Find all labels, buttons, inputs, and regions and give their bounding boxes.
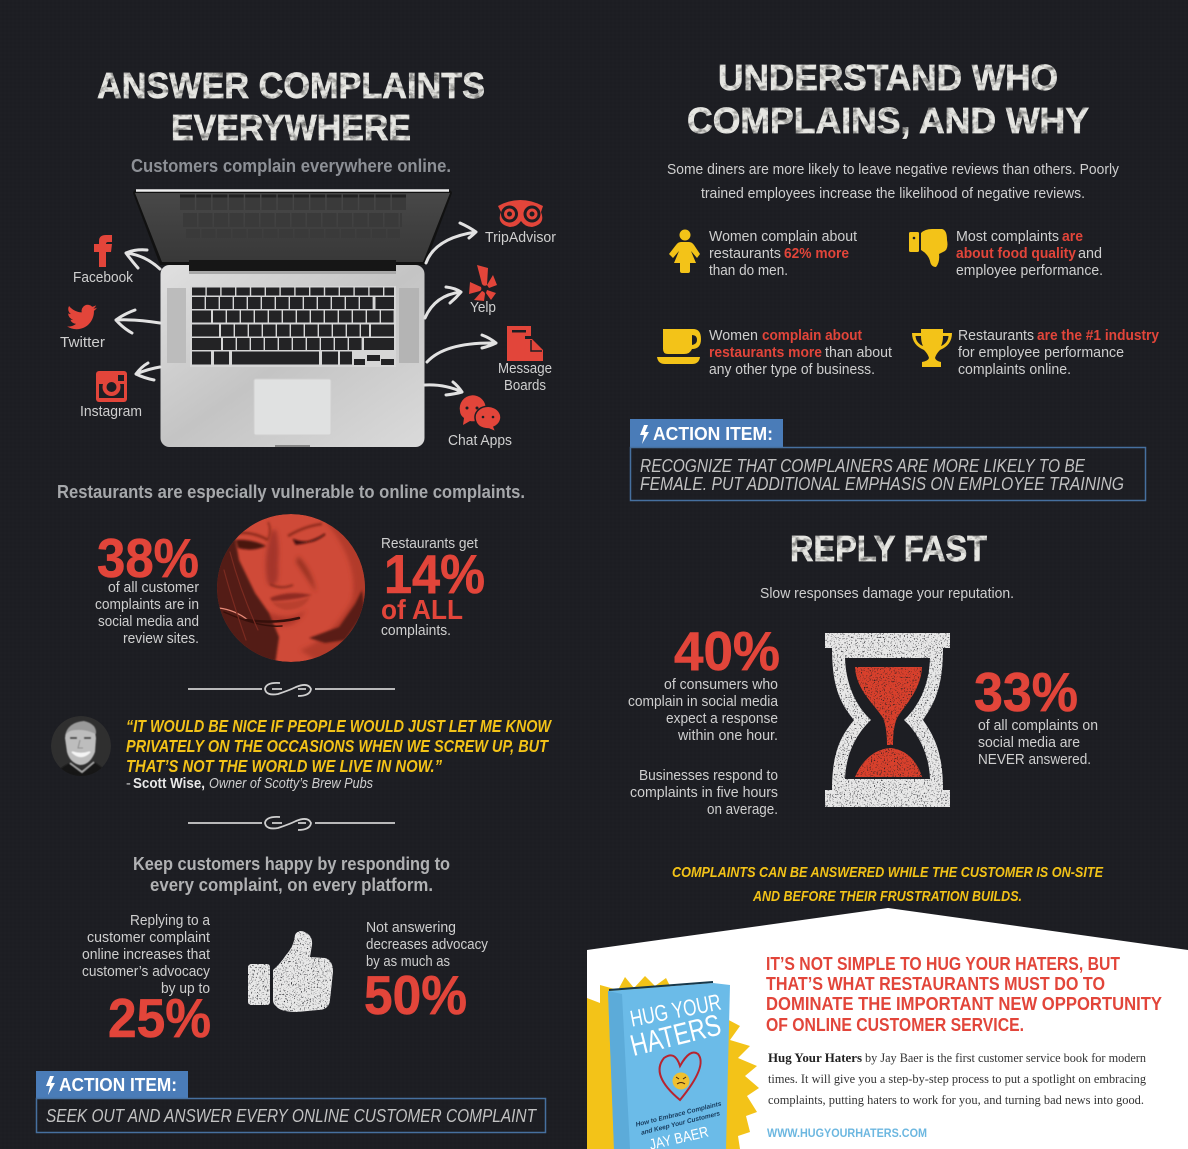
- intro text: diners: [667, 162, 1120, 202]
- action item: right column: RECOGNIZE THAT COMPLAINERS ARE MORE LIKELY TO BE: [640, 456, 1086, 476]
- title: answer complaints everywhere: [97, 65, 485, 148]
- laptop illustration: [133, 190, 452, 447]
- action item: right column: [630, 419, 1146, 500]
- icon: chalk thumbs up: [248, 931, 333, 1012]
- panel: book promotion: [587, 908, 1188, 1149]
- action item: right column: FEMALE. PUT ADDITIONAL EMPHASIS ON EMPLOYEE TRAINING: [640, 474, 1124, 494]
- stat: 50 percent: by as much as: [366, 954, 450, 970]
- fact: women complain 62 percent more: than do men.: [709, 263, 788, 279]
- body copy: times. It will give you a step-by-step process to put a spotlight on embracing: [768, 1072, 1147, 1086]
- stat: 14 percent of all: of ALL: [381, 594, 463, 625]
- text: businesses respond: Businesses respond to: [639, 768, 778, 784]
- title: answer complaints everywhere: EVERYWHERE: [171, 107, 411, 148]
- fact: restaurants are number one industry: are the #1 industry: [1037, 328, 1159, 344]
- subheading: keep customers happy: Keep customers happy by responding to: [133, 854, 450, 874]
- icon: chalk hourglass: [825, 633, 950, 807]
- subheading: keep customers happy: every complaint, on every platform.: [150, 875, 433, 895]
- icon and label: message boards: Message: [498, 361, 552, 377]
- icon and label: yelp: Yelp: [470, 300, 496, 316]
- body copy: Hug Your Haters: [768, 1051, 862, 1065]
- book cover: [608, 982, 730, 1149]
- action item: left column: ACTION ITEM:: [59, 1075, 177, 1095]
- icon and label: chat apps: [448, 395, 512, 449]
- body copy: by Jay Baer is the first customer service book for modern: [865, 1051, 1147, 1065]
- starburst behind book: [587, 976, 759, 1149]
- icon and label: tripadvisor: [485, 200, 556, 246]
- fact: women complain about restaurants more: than about: [825, 345, 892, 361]
- fact: women complain 62 percent more: Women complain about: [709, 229, 857, 245]
- stat: 50 percent: Not answering: [366, 920, 456, 936]
- stat: 25 percent: Replying to a: [130, 913, 211, 929]
- icon and label: chat apps: Chat Apps: [448, 433, 512, 449]
- action item: left column: SEEK OUT AND ANSWER EVERY ONLINE CUSTOMER COMPLAINT: [46, 1106, 538, 1126]
- stat: 40 percent: of consumers who: [664, 677, 778, 693]
- intro text: diners: Some diners are more likely to leave negative reviews than others. Poorly: [667, 162, 1120, 178]
- book cover: HATERS: [627, 1009, 724, 1063]
- icon: trophy: [912, 329, 952, 367]
- fact: restaurants are number one industry: for employee performance: [958, 345, 1124, 361]
- stat: 40 percent: expect a response: [666, 711, 778, 727]
- text: businesses respond: complaints in five hours: [630, 785, 778, 801]
- title: understand who complains: [687, 57, 1089, 141]
- fact: women complain 62 percent more: [669, 229, 857, 279]
- stat: 33 percent: [974, 661, 1098, 768]
- callout: complaints can be answered: [672, 864, 1104, 905]
- title: understand who complains: COMPLAINS, AND WHY: [687, 100, 1089, 141]
- stat: 40 percent: complain in social media: [628, 694, 779, 710]
- subheading: customers complain: Customers complain everywhere online.: [131, 156, 451, 176]
- stat: 33 percent: social media are: [978, 735, 1080, 751]
- fact: women complain about restaurants more: restaurants more: [709, 345, 822, 361]
- title: understand who complains: UNDERSTAND WHO: [718, 57, 1058, 98]
- icon and label: message boards: [498, 326, 552, 394]
- stat: 38 percent: social media and: [98, 614, 199, 630]
- book cover: HUG YOUR: [628, 989, 723, 1032]
- stat: 25 percent: customer complaint: [87, 930, 210, 946]
- stat: 25 percent: 25%: [108, 987, 211, 1049]
- stat: 50 percent: 50%: [364, 964, 467, 1026]
- icon and label: twitter: [60, 305, 105, 351]
- stat: 33 percent: of all complaints on: [978, 718, 1098, 734]
- icon and label: twitter: Twitter: [60, 335, 105, 351]
- portrait: scott wise: [50, 716, 112, 778]
- photo: frowning woman in red: [217, 514, 365, 662]
- fact: women complain 62 percent more: restaurants: [709, 246, 781, 262]
- quote: scott wise: THAT’S NOT THE WORLD WE LIVE IN NOW.”: [126, 756, 442, 776]
- text: businesses respond: on average.: [707, 802, 778, 818]
- book cover: and Keep Your Customers: [640, 1110, 721, 1137]
- stat: 38 percent: 38%: [97, 527, 199, 589]
- stat: 50 percent: [364, 920, 489, 1026]
- icon and label: facebook: Facebook: [73, 270, 134, 286]
- icon and label: instagram: Instagram: [80, 404, 142, 420]
- fact: complaints about food quality: [909, 229, 1103, 279]
- heading: hug your haters: OF ONLINE CUSTOMER SERVICE.: [766, 1014, 1024, 1035]
- quote: scott wise: Scott Wise,: [133, 776, 205, 792]
- subheading: keep customers happy: [133, 854, 450, 895]
- stat: 38 percent: [95, 527, 199, 647]
- title: answer complaints everywhere: ANSWER COMPLAINTS: [97, 65, 485, 106]
- icon and label: tripadvisor: TripAdvisor: [485, 230, 556, 246]
- quote: scott wise: -: [126, 776, 131, 792]
- stat: 25 percent: online increases that: [82, 947, 210, 963]
- subheading: slow responses: Slow responses damage your reputation.: [760, 586, 1014, 602]
- fact: restaurants are number one industry: complaints online.: [958, 362, 1071, 378]
- heading: hug your haters: IT’S NOT SIMPLE TO HUG YOUR HATERS, BUT: [766, 953, 1121, 974]
- icon and label: yelp: [469, 265, 497, 316]
- stat: 25 percent: [82, 913, 211, 1049]
- fact: complaints about food quality: about food quality: [956, 246, 1076, 262]
- action item: right column: ACTION ITEM:: [653, 424, 773, 444]
- quote: scott wise: “IT WOULD BE NICE IF PEOPLE WOULD JUST LET ME KNOW: [126, 716, 552, 736]
- fact: women complain 62 percent more: 62% more: [784, 246, 849, 262]
- fact: women complain about restaurants more: [657, 328, 892, 378]
- stat: 25 percent: by up to: [161, 981, 210, 997]
- icon and label: facebook: [73, 235, 134, 286]
- divider flourish: [188, 683, 395, 696]
- body copy: [768, 1051, 1147, 1107]
- fact: women complain about restaurants more: complain about: [762, 328, 862, 344]
- stat: 40 percent: 40%: [674, 620, 780, 682]
- stat: 14 percent of all: [381, 536, 485, 639]
- stat: 33 percent: NEVER answered.: [978, 752, 1091, 768]
- stat: 38 percent: of all customer: [108, 580, 199, 596]
- stat: 14 percent of all: 14%: [384, 543, 485, 605]
- callout: complaints can be answered: COMPLAINTS CAN BE ANSWERED WHILE THE CUSTOMER IS ON-SITE: [672, 864, 1104, 881]
- arrows from laptop to platforms: [116, 223, 496, 395]
- book cover: How to Embrace Complaints: [635, 1100, 723, 1129]
- icon: coffee cup: [657, 329, 701, 364]
- callout: complaints can be answered: AND BEFORE THEIR FRUSTRATION BUILDS.: [752, 888, 1022, 905]
- quote: scott wise: [126, 716, 552, 792]
- divider flourish: [188, 817, 395, 830]
- heading: hug your haters: THAT’S WHAT RESTAURANTS MUST DO TO: [766, 973, 1105, 994]
- fact: complaints about food quality: Most complaints: [956, 229, 1059, 245]
- stat: 14 percent of all: Restaurants get: [381, 536, 478, 552]
- fact: complaints about food quality: are: [1062, 229, 1083, 245]
- stat: 25 percent: customer’s advocacy: [82, 964, 211, 980]
- subheading: restaurants vulnerable: Restaurants are especially vulnerable to online complaints.: [57, 482, 525, 502]
- title: reply fast: REPLY FAST: [790, 528, 987, 569]
- quote: scott wise: Owner of Scotty’s Brew Pubs: [209, 776, 373, 792]
- stat: 38 percent: review sites.: [123, 631, 199, 647]
- body copy: complaints, putting haters to work for you, and turning bad news into good.: [768, 1093, 1144, 1107]
- icon and label: instagram: [80, 371, 142, 420]
- link: book website: WWW.HUGYOURHATERS.COM: [767, 1128, 927, 1140]
- fact: complaints about food quality: employee performance.: [956, 263, 1103, 279]
- fact: women complain about restaurants more: Women: [709, 328, 758, 344]
- icon and label: message boards: Boards: [504, 378, 546, 394]
- quote: scott wise: PRIVATELY ON THE OCCASIONS WHEN WE SCREW UP, BUT: [126, 736, 549, 756]
- fact: restaurants are number one industry: Restaurants: [958, 328, 1034, 344]
- heading: hug your haters: [766, 953, 1163, 1035]
- icon: woman: [669, 230, 700, 273]
- icon: thumbs down: [909, 229, 948, 267]
- stat: 40 percent: within one hour.: [677, 728, 778, 744]
- fact: women complain about restaurants more: any other type of business.: [709, 362, 875, 378]
- stat: 14 percent of all: complaints.: [381, 623, 451, 639]
- stat: 33 percent: 33%: [974, 661, 1078, 723]
- stat: 50 percent: decreases advocacy: [366, 937, 489, 953]
- stat: 38 percent: complaints are in: [95, 597, 199, 613]
- text: businesses respond: [630, 768, 778, 818]
- stat: 40 percent: [628, 620, 780, 744]
- fact: complaints about food quality: and: [1078, 246, 1102, 262]
- action item: left column: [36, 1071, 546, 1132]
- intro text: diners: trained employees increase the likelihood of negative reviews.: [701, 186, 1085, 202]
- fact: restaurants are number one industry: [912, 328, 1159, 378]
